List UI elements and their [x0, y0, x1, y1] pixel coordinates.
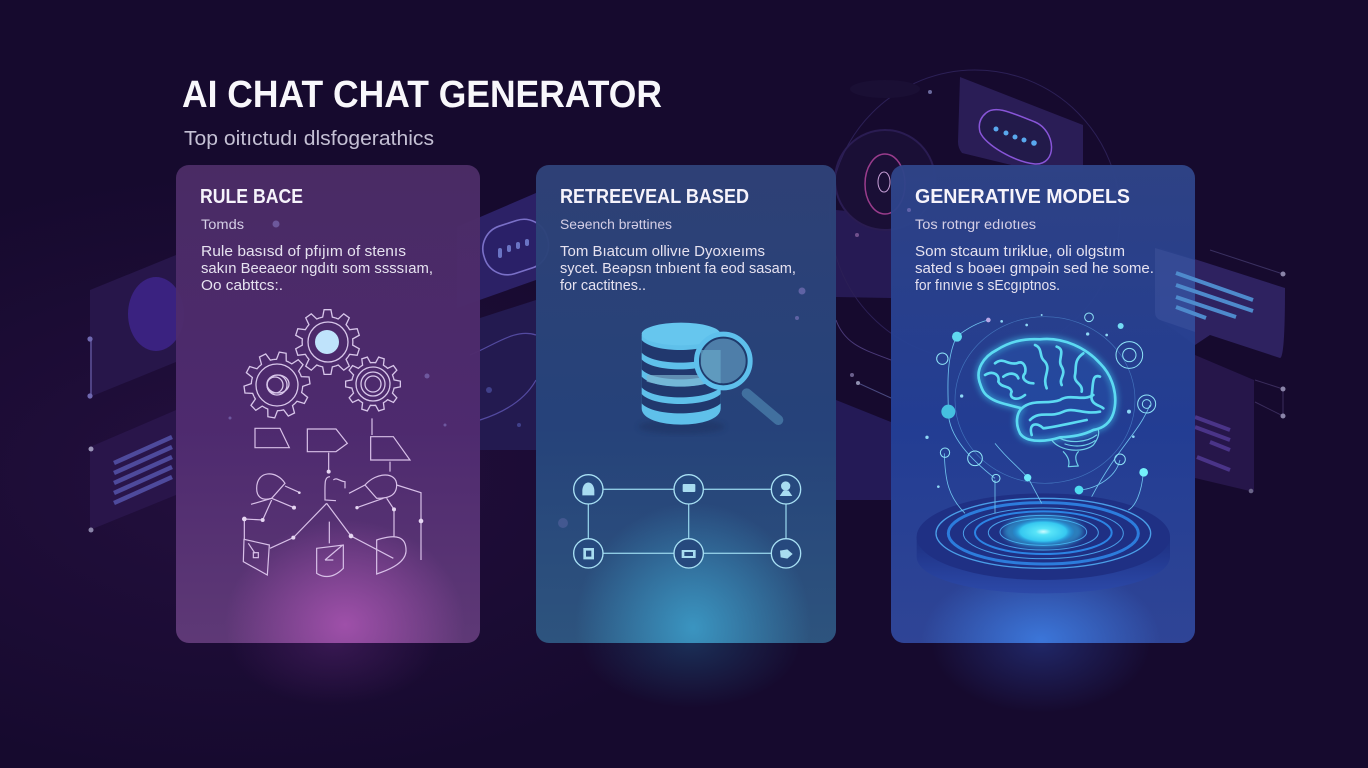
icon: stripes of speech bubble showing through card: [1155, 248, 1253, 332]
background: top right chat panel: [958, 77, 1083, 172]
text block: rule description: [201, 243, 433, 294]
background: left chat panel: [87, 255, 184, 399]
background: right chat panel: [1160, 248, 1286, 358]
icon: gears: [238, 310, 408, 423]
text block: rule description: Rule basısd of pfıjım of stenıs: [201, 243, 406, 260]
text block: generative description: for fınıvıe s sEcgıptnos.: [915, 277, 1060, 294]
panel: generative models: [891, 165, 1254, 643]
text block: retrieval description: [560, 243, 796, 294]
text block: retrieval description: for cactitnes..: [560, 277, 646, 294]
label: generative subtitle: Tos rotngr edıotıes: [915, 217, 1036, 232]
panel: retrieval based: [536, 165, 836, 643]
background: left text panel: [88, 410, 176, 532]
label: retrieval subtitle: Seəench brəttines: [560, 217, 672, 232]
text block: generative description: sated s boəeı gmpəin sed he some.: [915, 260, 1154, 277]
subtitle: Top oitıctudı dlsfogerathics: [184, 128, 434, 150]
text block: retrieval description: sycet. Beəpsn tnbıent fa eod sasam,: [560, 260, 796, 277]
background: centre right panels and rings: [830, 70, 1120, 500]
icon: glowing platform: [917, 493, 1170, 593]
flowchart: [242, 418, 423, 577]
text block: generative description: Som stcaum tıriklue, oli olgstım: [915, 243, 1125, 260]
text block: rule description: sakın Beeaeor ngdıtı som ssssıam,: [201, 260, 433, 277]
heading: rule base: RULE BACE: [200, 186, 303, 208]
label: rule subtitle: Tomds: [201, 217, 244, 232]
icon: database with magnifier: [638, 323, 778, 434]
text block: generative description: [915, 243, 1154, 294]
particles: [228, 208, 911, 528]
panel: rule based: [176, 165, 480, 643]
background: centre left panels: [457, 193, 555, 450]
icon: glowing brain: [979, 339, 1115, 467]
text block: retrieval description: Tom Bıatcum ollivıe Dyoxıeıms: [560, 243, 765, 260]
chart: network of nodes: [574, 475, 801, 568]
heading: generative: GENERATIVE MODELS: [915, 186, 1130, 208]
heading: retrieval: RETREEVEAL BASED: [560, 186, 749, 208]
text block: rule description: Oo cabttcs:.: [201, 277, 283, 294]
background: right text panel: [1195, 355, 1286, 493]
title: AI CHAT CHAT GENERATOR: [182, 74, 662, 116]
network nodes around brain: [925, 313, 1156, 513]
